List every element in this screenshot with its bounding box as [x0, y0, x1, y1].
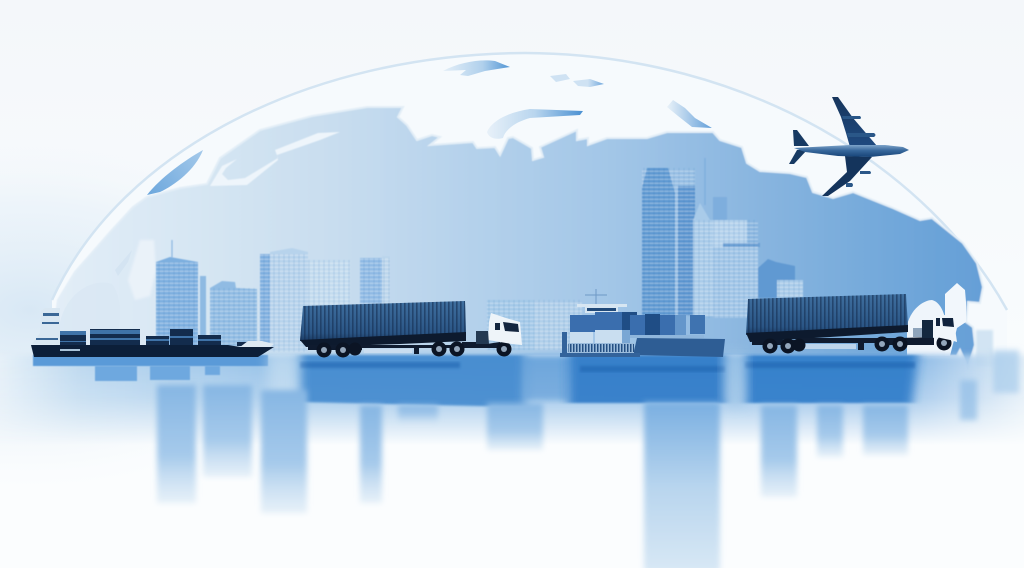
map: main landmass [54, 107, 983, 368]
cab [933, 315, 957, 342]
map: far right pale buildings [976, 330, 993, 366]
lower wing [822, 156, 872, 196]
ship superstructure [32, 308, 60, 345]
ship containers [60, 329, 248, 346]
fuselage [794, 145, 909, 157]
truck: right semi with container [746, 294, 957, 354]
skyline: left city [156, 240, 390, 352]
cargo containers [570, 312, 622, 332]
map: pale western land details [60, 132, 340, 356]
boat: cargo barge [560, 289, 725, 357]
barge hull [633, 338, 725, 357]
city reflections [157, 350, 1019, 568]
map: arctic seas and islands [443, 60, 712, 139]
ship hull [31, 345, 274, 357]
chassis [308, 342, 500, 354]
chassis [752, 337, 934, 350]
tail [793, 130, 809, 146]
ladder [913, 328, 922, 337]
ship: container vessel [31, 308, 274, 357]
truck: left semi with container [300, 301, 522, 358]
wheels [762, 336, 952, 354]
cab [488, 313, 522, 345]
water surface [12, 351, 1024, 440]
engines [842, 116, 876, 187]
container [300, 301, 466, 341]
map: white patches by the east coast [907, 283, 966, 356]
skyline: center and right city [487, 158, 803, 350]
wheels [316, 342, 512, 358]
upper wing [832, 97, 877, 147]
globe dome [52, 53, 1007, 356]
wheelhouse [577, 304, 627, 313]
airplane [789, 97, 909, 196]
container [746, 294, 908, 335]
